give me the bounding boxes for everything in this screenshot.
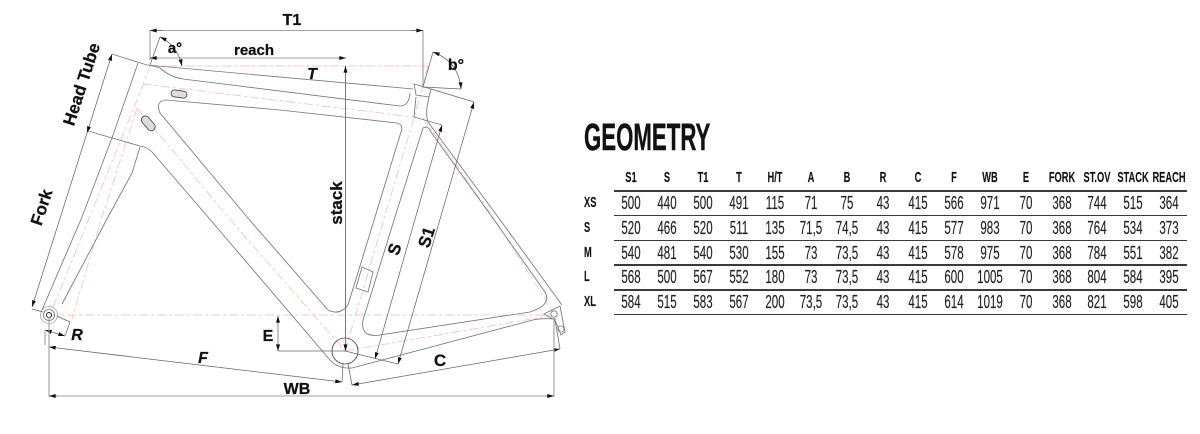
dimension labels: stack <box>327 181 346 225</box>
row L: 368 <box>1052 267 1072 287</box>
row S: 534 <box>1123 218 1143 238</box>
row XL: 43 <box>877 292 889 312</box>
row S: 71,5 <box>800 218 822 238</box>
front axle <box>40 306 58 324</box>
row XS: 500 <box>621 193 641 213</box>
head tube dimension <box>87 54 112 133</box>
row S: 373 <box>1159 218 1179 238</box>
header row: S1 <box>625 169 637 186</box>
row M: 784 <box>1087 243 1107 263</box>
dimension labels: WB <box>284 381 310 398</box>
bottom bracket <box>332 338 358 364</box>
row S: 415 <box>908 218 928 238</box>
seat collar <box>414 84 431 97</box>
header row: H/T <box>768 169 782 186</box>
row L: 584 <box>1123 267 1143 287</box>
row M: 975 <box>980 243 1000 263</box>
row XL: 821 <box>1087 292 1107 312</box>
down tube and seat tube <box>158 100 402 312</box>
frame geometry diagram <box>27 12 566 398</box>
row M: 530 <box>729 243 749 263</box>
row S <box>584 218 1179 238</box>
rear dropout <box>544 306 565 335</box>
row XL: 405 <box>1159 292 1179 312</box>
S dimension <box>375 125 442 359</box>
head tube and fork <box>42 63 138 310</box>
row S: 764 <box>1087 218 1107 238</box>
row L: 415 <box>908 267 928 287</box>
row S: 511 <box>730 218 748 238</box>
seat tube box <box>356 267 373 292</box>
row M: 540 <box>693 243 713 263</box>
row M: 481 <box>657 243 677 263</box>
row L: 1005 <box>977 267 1003 287</box>
row L: 804 <box>1087 267 1107 287</box>
row M: M <box>584 244 592 261</box>
row L: 73 <box>805 267 817 287</box>
row XL: 73,5 <box>836 292 858 312</box>
row S: 43 <box>877 218 889 238</box>
header row: S <box>664 169 670 186</box>
row XS: 566 <box>944 193 964 213</box>
row XL: 415 <box>908 292 928 312</box>
dimension labels: S1 <box>415 224 439 250</box>
row M: 155 <box>765 243 785 263</box>
geometry table <box>584 169 1187 315</box>
row XL: 515 <box>657 292 677 312</box>
row L: 73,5 <box>836 267 858 287</box>
dimension labels: T <box>307 66 318 83</box>
E dimension <box>277 316 279 351</box>
dimension labels: E <box>263 328 274 345</box>
dimension labels: R <box>71 327 83 344</box>
row XS <box>584 193 1179 213</box>
WB dimension <box>49 317 554 396</box>
row XL: 614 <box>944 292 964 312</box>
row S: 983 <box>980 218 1000 238</box>
header row: A <box>808 169 814 186</box>
row S: 466 <box>657 218 677 238</box>
row XS: XS <box>584 194 596 211</box>
bolt slots <box>171 89 187 99</box>
angle b <box>423 52 461 89</box>
row XL: XL <box>584 293 596 310</box>
row XL: 583 <box>693 292 713 312</box>
R dimension <box>45 330 65 336</box>
row S: 70 <box>1020 218 1032 238</box>
row M: 578 <box>944 243 964 263</box>
header row: WB <box>982 169 998 186</box>
stack dimension <box>344 66 346 351</box>
dimension labels: T1 <box>283 12 301 29</box>
row XS: 744 <box>1087 193 1107 213</box>
row XL: 70 <box>1020 292 1032 312</box>
row L: 395 <box>1159 267 1179 287</box>
C dimension <box>348 364 352 385</box>
header row: REACH <box>1152 169 1186 186</box>
dimension labels: F <box>198 350 209 367</box>
frame outline <box>40 54 565 368</box>
row M <box>584 243 1179 263</box>
row M: 43 <box>877 243 889 263</box>
row XS: 364 <box>1159 193 1179 213</box>
header row: F <box>951 169 957 186</box>
dimension labels: S <box>384 241 406 258</box>
row M: 73,5 <box>836 243 858 263</box>
dimension labels: a° <box>168 40 182 57</box>
row L: 568 <box>621 267 641 287</box>
row XS: 500 <box>693 193 713 213</box>
header row: ST.OV <box>1084 169 1110 186</box>
row XS: 75 <box>841 193 853 213</box>
row M: 73 <box>805 243 817 263</box>
S1 dimension <box>431 89 474 102</box>
fork dimension <box>32 133 87 307</box>
row XS: 115 <box>766 193 784 213</box>
row S: S <box>584 219 590 236</box>
row XS: 491 <box>729 193 749 213</box>
row M: 415 <box>908 243 928 263</box>
row XL: 1019 <box>977 292 1003 312</box>
title: GEOMETRY <box>584 117 710 159</box>
header row <box>625 169 1186 186</box>
row XS: 43 <box>877 193 889 213</box>
dimension labels: reach <box>234 42 274 59</box>
row XS: 440 <box>657 193 677 213</box>
row XL: 200 <box>765 292 785 312</box>
row XL: 73,5 <box>800 292 822 312</box>
header row: R <box>880 169 886 186</box>
dimension labels: C <box>434 351 446 370</box>
header row: B <box>844 169 850 186</box>
row XL: 584 <box>621 292 641 312</box>
dimension labels: Fork <box>27 186 57 228</box>
header row: T <box>736 169 742 186</box>
header row: T1 <box>698 169 708 186</box>
row S: 520 <box>621 218 641 238</box>
row XS: 515 <box>1123 193 1143 213</box>
header row: C <box>915 169 921 186</box>
row XS: 368 <box>1052 193 1072 213</box>
row L: 180 <box>765 267 785 287</box>
row S: 368 <box>1052 218 1072 238</box>
dimension lines <box>32 30 560 396</box>
row XL: 598 <box>1123 292 1143 312</box>
row M: 551 <box>1123 243 1143 263</box>
row XS: 70 <box>1020 193 1032 213</box>
reach dimension <box>150 57 346 59</box>
T1 dimension <box>150 30 423 87</box>
row XL: 368 <box>1052 292 1072 312</box>
top tube <box>112 54 413 89</box>
header row: E <box>1023 169 1029 186</box>
row L: 552 <box>729 267 749 287</box>
dimension labels <box>27 12 464 398</box>
row XL: 567 <box>729 292 749 312</box>
row M: 368 <box>1052 243 1072 263</box>
row L <box>584 267 1179 287</box>
header row: FORK <box>1049 169 1075 186</box>
row M: 540 <box>621 243 641 263</box>
row S: 135 <box>765 218 785 238</box>
row S: 74,5 <box>836 218 858 238</box>
seat stay <box>427 107 562 305</box>
row L: 70 <box>1020 267 1032 287</box>
row L: L <box>584 268 590 285</box>
row XL <box>584 292 1179 312</box>
row L: 600 <box>944 267 964 287</box>
row S: 520 <box>693 218 713 238</box>
row L: 500 <box>657 267 677 287</box>
row M: 70 <box>1020 243 1032 263</box>
angle a <box>150 37 160 65</box>
header row: STACK <box>1117 169 1149 186</box>
F dimension <box>49 347 342 382</box>
dimension labels: Head Tube <box>60 41 104 128</box>
row L: 567 <box>693 267 713 287</box>
row XS: 71 <box>805 193 817 213</box>
frame centre lines <box>49 65 554 351</box>
row M: 382 <box>1159 243 1179 263</box>
dimension labels: b° <box>448 57 464 74</box>
row S: 577 <box>944 218 964 238</box>
row L: 43 <box>877 267 889 287</box>
row XS: 415 <box>908 193 928 213</box>
row XS: 971 <box>980 193 1000 213</box>
